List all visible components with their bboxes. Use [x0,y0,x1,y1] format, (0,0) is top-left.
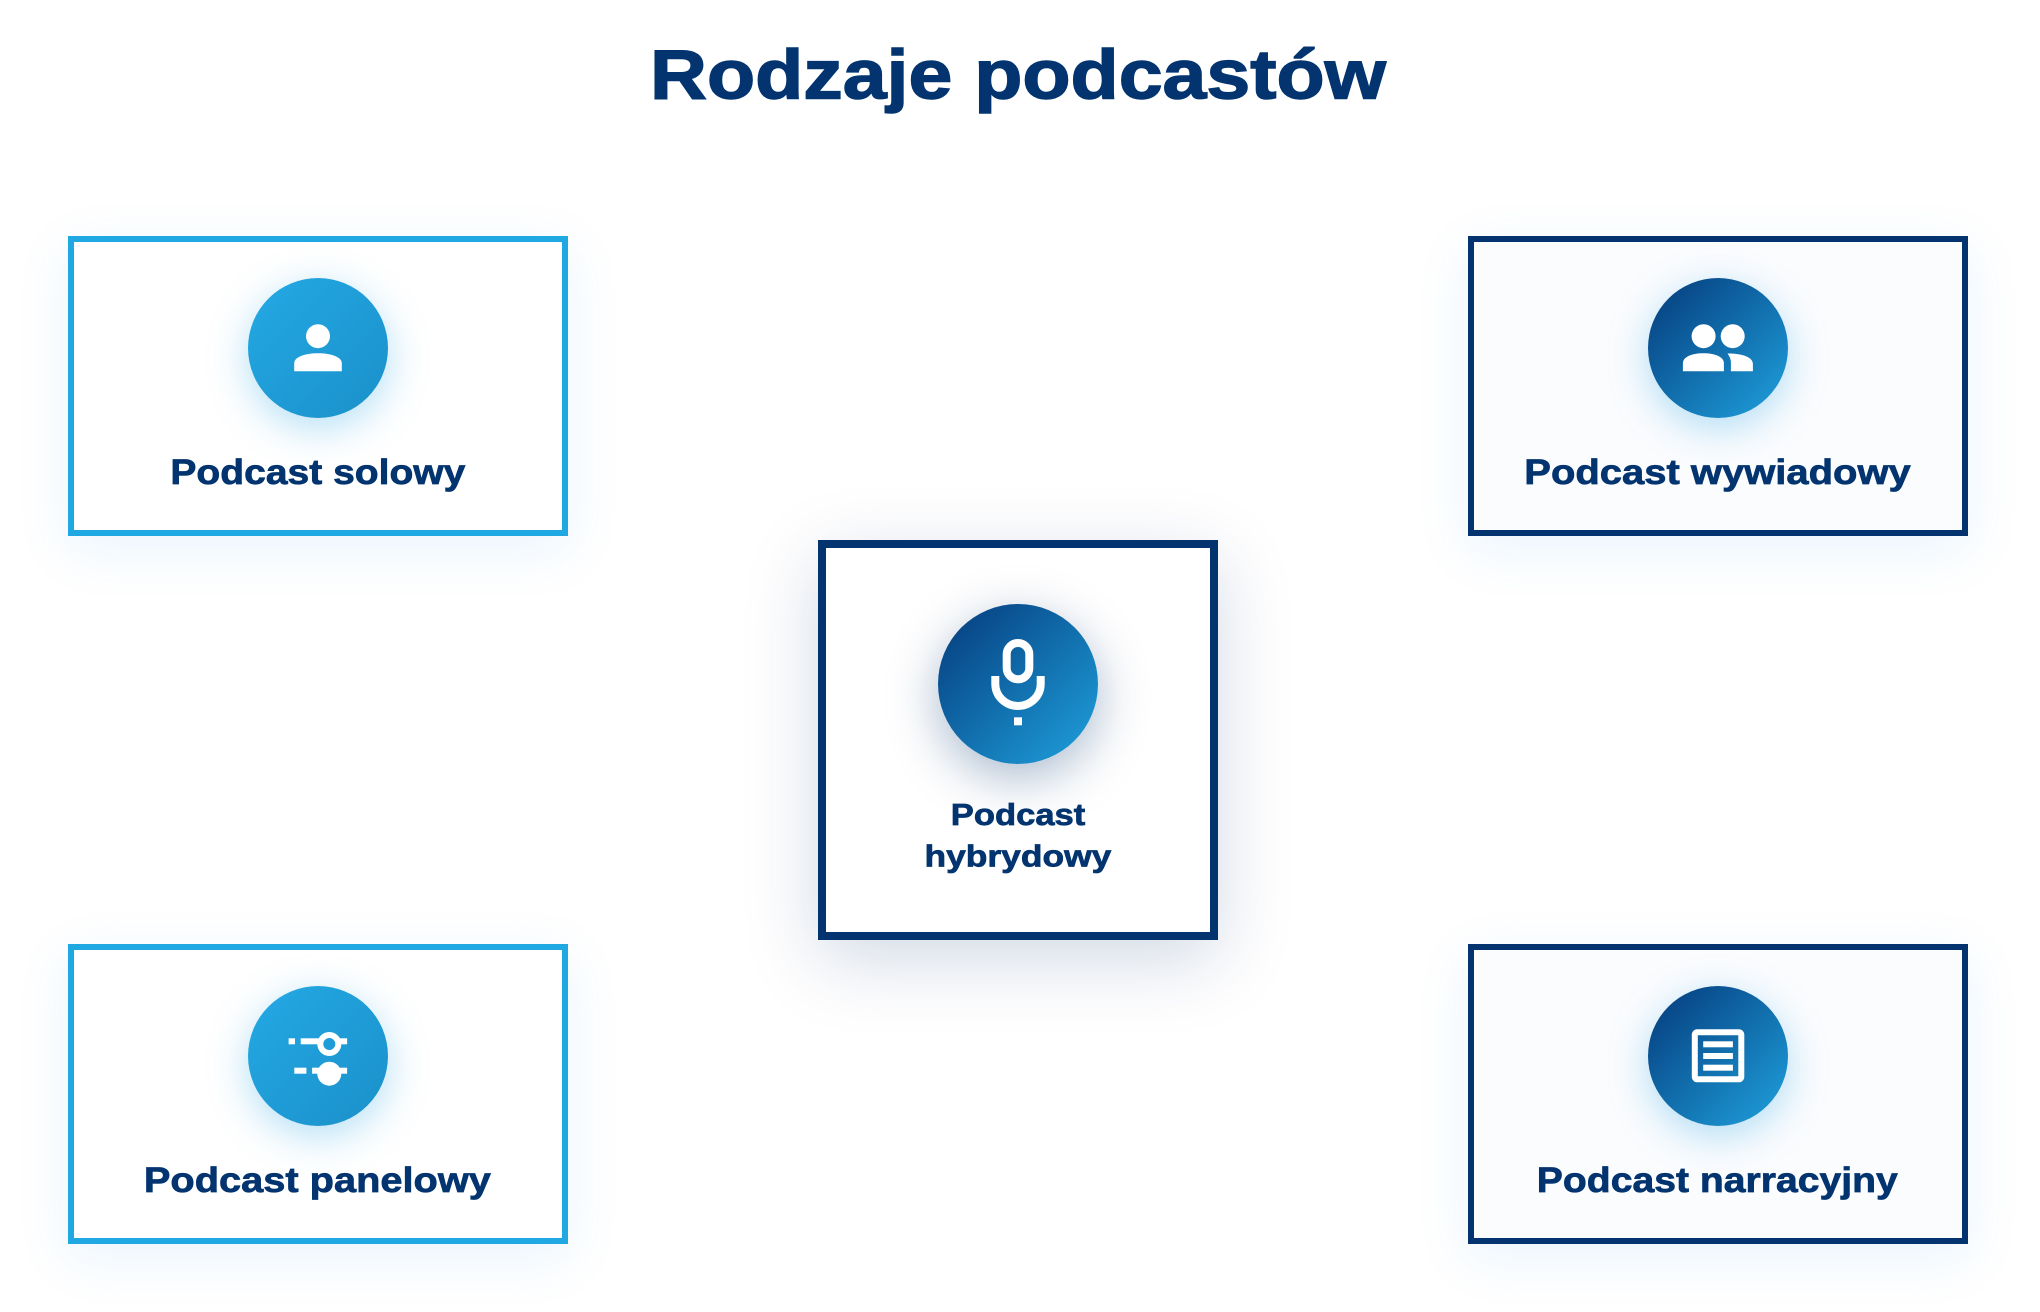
label: Podcast panelowy: Podcast panelowy [144,1161,491,1200]
panel: Podcast panelowy [60,944,576,1266]
label: Podcast solowy: Podcast solowy [170,453,466,492]
panel: Podcast solowy [60,236,576,558]
label: Podcast hybrydowy: hybrydowy [924,839,1112,874]
icon: microphone [938,604,1098,764]
label: Podcast hybrydowy: Podcast [951,797,1085,832]
panel: Podcast wywiadowy [1460,236,1976,558]
label: Podcast hybrydowy [924,797,1112,874]
icon: person [248,278,388,418]
title: Rodzaje podcastów [650,36,1387,114]
panel: Podcast narracyjny [1460,944,1976,1266]
icon: document [1648,986,1788,1126]
label: Podcast narracyjny: Podcast narracyjny [1537,1161,1898,1200]
icon: two people [1648,278,1788,418]
panel: Podcast hybrydowy [786,528,1250,992]
label: Podcast wywiadowy: Podcast wywiadowy [1524,453,1911,492]
icon: sliders [248,986,388,1126]
